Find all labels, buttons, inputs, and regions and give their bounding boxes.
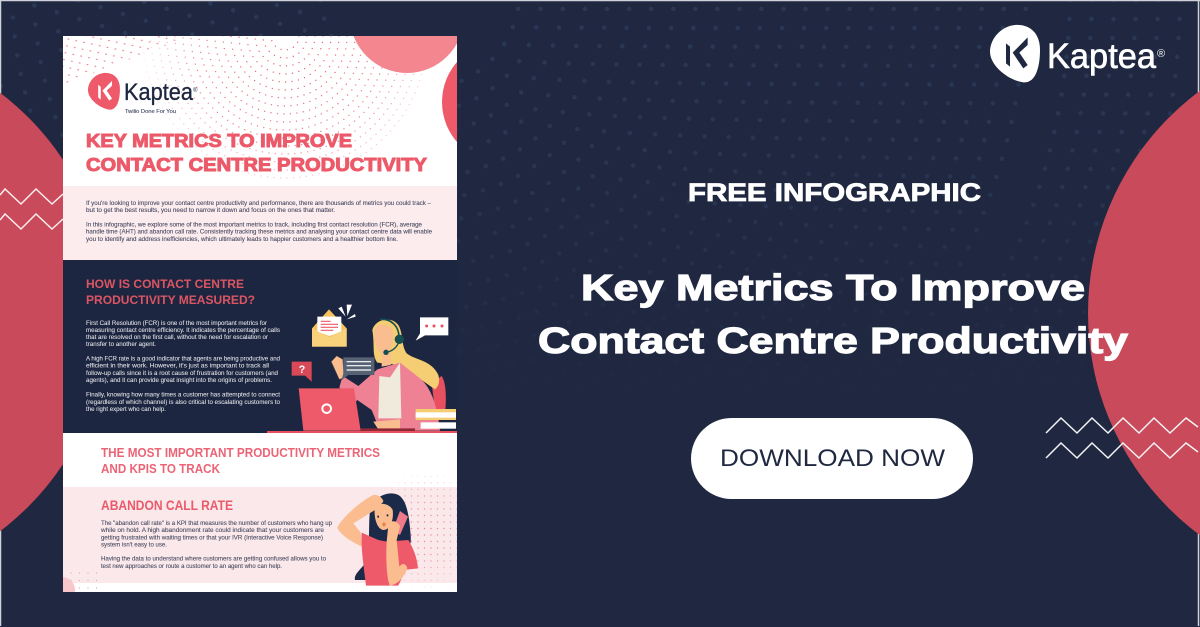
logo mark (990, 25, 1040, 82)
section heading: AND KPIS TO TRACK (101, 462, 220, 476)
books (416, 409, 456, 429)
desk (361, 428, 415, 432)
download button: DOWNLOAD NOW (720, 445, 945, 472)
headset (380, 319, 404, 355)
shirt (361, 533, 418, 586)
navy panel text: Finally, knowing how many times a customer has attempted to connect (86, 392, 280, 399)
main headline (538, 267, 1128, 361)
navy panel heading: PRODUCTIVITY MEASURED? (86, 293, 255, 307)
abandon call rate text: Having the data to understand where customers are getting confused allows you to (101, 556, 326, 563)
abandon call rate text: while on hold. A high abandonment rate could indicate that your customers are (100, 527, 324, 534)
navy panel text: agents), and it can provide great insight into the origins of problems. (86, 377, 272, 384)
left zigzag (0, 189, 63, 229)
intro text (86, 200, 432, 243)
card dot pattern (142, 36, 422, 179)
abandon call rate text: system isn't easy to use. (101, 541, 167, 548)
abandon call rate text (100, 520, 332, 570)
background dot pattern (1, 1, 1182, 305)
card main title (86, 134, 428, 172)
bottom-left dots (63, 566, 101, 592)
navy panel text: efficient in their work. However, it's just as important to track all (86, 363, 270, 370)
card pink blob (354, 36, 457, 73)
navy panel text (86, 320, 281, 413)
white heading panel (63, 433, 457, 487)
card main title: KEY METRICS TO IMPROVE (86, 130, 352, 151)
jacket (339, 363, 440, 431)
logo registered mark: ® (1157, 48, 1165, 60)
card logo (88, 73, 198, 115)
navy panel text: A high FCR rate is a good indicator that agents are being productive and (86, 356, 280, 363)
pink panel (63, 487, 457, 583)
icon: question bubble (292, 362, 312, 382)
icon: question bubble: ? (299, 364, 305, 376)
forearm on desk (373, 419, 400, 429)
intro text: handle time (AHT) and abandon call rate. Consistently tracking these metrics and analysing your contact centre data will enable (86, 229, 432, 236)
abandon call rate text: The "abandon call rate" is a KPI that measures the number of customers who hang up (101, 520, 332, 527)
face (374, 325, 393, 367)
navy panel heading: HOW IS CONTACT CENTRE (86, 277, 244, 291)
face (375, 504, 393, 530)
right zigzag (1046, 418, 1198, 458)
icon: spark lines (338, 305, 356, 319)
phone arm (386, 521, 407, 586)
navy panel heading (86, 280, 254, 304)
section heading (101, 448, 380, 473)
navy panel text: transfer to another agent. (86, 341, 156, 348)
navy panel text: First Call Resolution (FCR) is one of the most important metrics for (86, 320, 268, 327)
download button (691, 418, 973, 499)
card logo registered mark: ® (193, 87, 198, 94)
blouse (378, 363, 401, 418)
bottom-left pink blob (49, 577, 75, 603)
card logo mark (88, 73, 120, 110)
phone (393, 511, 408, 535)
card top-left dots (63, 36, 176, 83)
icon: speech bubble (416, 317, 448, 341)
chair (432, 376, 446, 410)
intro text: If you're looking to improve your contact centre productivity and performance, there are thousands of metrics you could track – (86, 200, 431, 207)
eyes (377, 514, 388, 518)
intro panel (63, 186, 457, 260)
navy panel text: follow-up calls since it is a root cause of frustration for customers (and (86, 370, 278, 377)
intro text: but to get the best results, you need to narrow it down and focus on the ones that matter. (86, 207, 335, 214)
card red blob (442, 62, 457, 142)
right red circle (1088, 36, 1200, 590)
main headline: Contact Centre Productivity (538, 320, 1128, 361)
top-right logo (990, 25, 1165, 82)
hair (355, 493, 411, 580)
mouth (382, 522, 386, 526)
hand (331, 356, 344, 379)
right side dots (385, 433, 457, 592)
desk band (267, 431, 457, 433)
main headline: Key Metrics To Improve (581, 267, 1085, 308)
raised arm (337, 495, 383, 547)
agent illustration (292, 305, 456, 432)
intro text: In this infographic, we explore some of the most important metrics to track, including first contact resolution (FCR), average (86, 222, 422, 229)
abandon call rate text: test new approaches or route a customer to an agent who can help. (101, 563, 282, 570)
navy panel text: (regardless of which channel) is also critical to escalating customers to (86, 399, 280, 406)
card top white section (63, 36, 457, 186)
navy panel text: the right expert who can help. (86, 406, 166, 413)
infographic preview card (63, 36, 457, 592)
left red circle (0, 37, 109, 587)
gray chat bubble (342, 357, 374, 380)
abandon call rate text: getting frustrated with waiting times or that your IVR (Interactive Voice Response) (101, 534, 323, 541)
laptop (299, 388, 361, 431)
icon: envelope (312, 309, 347, 347)
free infographic label: FREE INFOGRAPHIC (688, 179, 981, 207)
navy panel text: that are resolved on the first call, without the need for escalation or (86, 334, 269, 341)
card logo wordmark: Kaptea (124, 79, 194, 106)
woman on phone illustration (337, 493, 418, 586)
abandon call rate heading: ABANDON CALL RATE (101, 498, 233, 513)
logo wordmark: Kaptea (1047, 37, 1157, 76)
white footer strip (63, 583, 457, 592)
section heading: THE MOST IMPORTANT PRODUCTIVITY METRICS (101, 446, 380, 460)
card logo tagline: Twilio Done For You (125, 109, 176, 115)
intro text: you to identify and address inefficiencies, which ultimately leads to happier customers and a healthier bottom line. (86, 236, 398, 243)
card main title: CONTACT CENTRE PRODUCTIVITY (86, 154, 428, 175)
hair (372, 320, 439, 389)
navy panel text: measuring contact centre efficiency. It indicates the percentage of calls (86, 327, 281, 334)
navy panel (63, 260, 457, 433)
